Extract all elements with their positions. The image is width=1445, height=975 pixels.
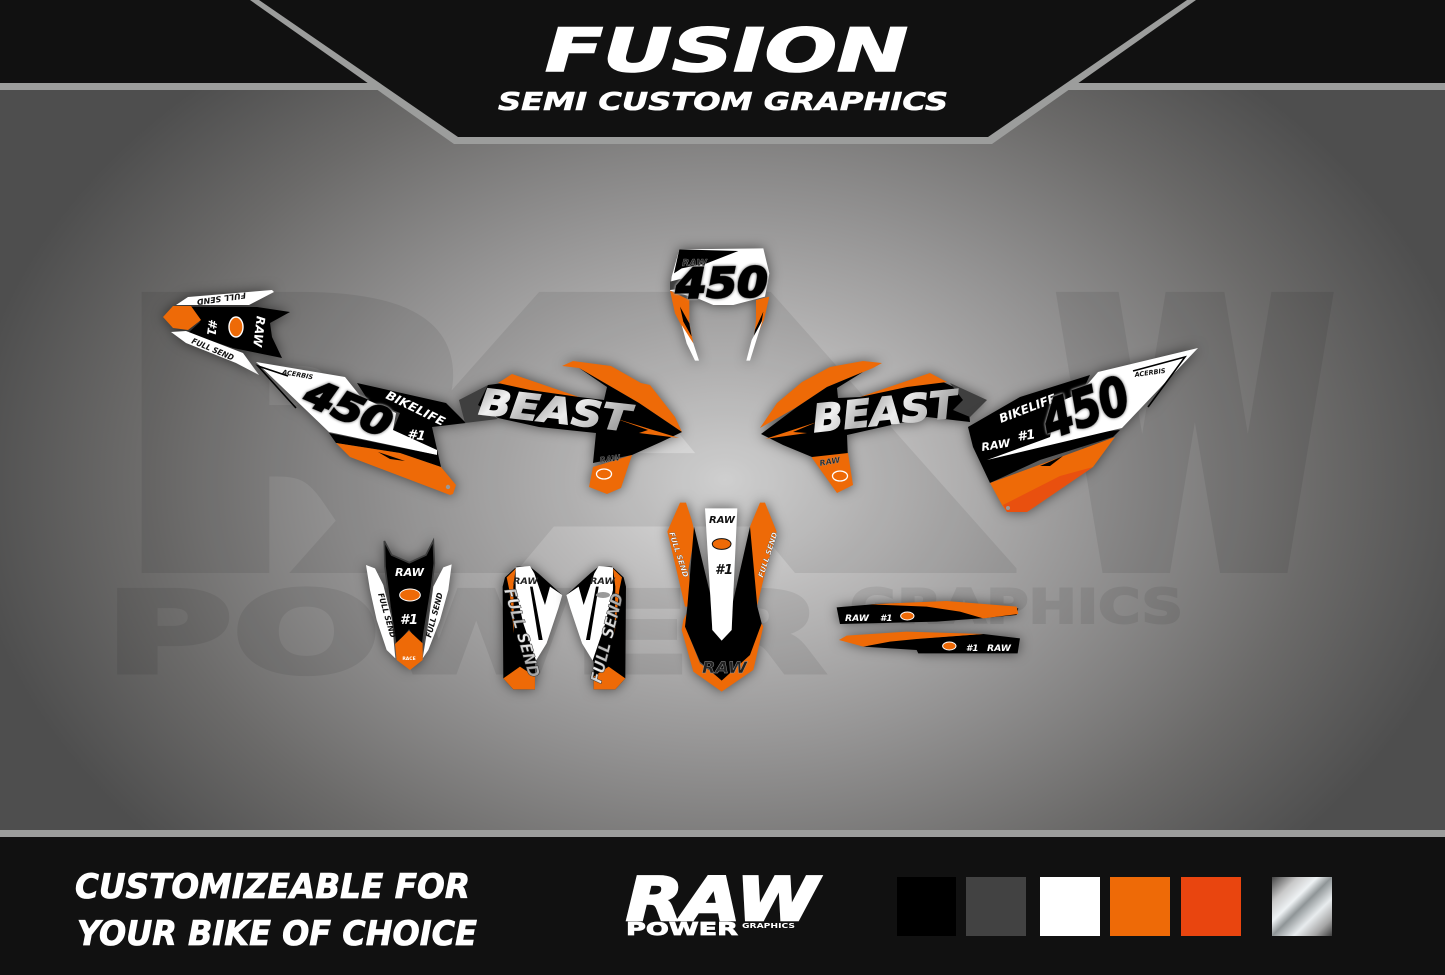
panel jag [378, 452, 405, 461]
front fender RAW bottom: RAW [702, 658, 748, 677]
watermark: RAW: W [1060, 235, 1330, 643]
r shroud grey [950, 383, 987, 417]
footer heading line 2: YOUR BIKE OF CHOICE [77, 914, 477, 954]
background gradient panel [0, 85, 1445, 835]
logo RAW: RAW [626, 865, 821, 935]
fender black body [188, 307, 290, 358]
left radiator shroud [459, 361, 682, 494]
rear fender shapes [366, 541, 452, 670]
footer grey strip [0, 830, 1445, 837]
header black notch [259, 0, 1187, 137]
front fender text right: FULL SEND [756, 531, 779, 579]
r shroud text BEAST: BEAST [810, 382, 962, 441]
right panel number: 450 [1034, 366, 1137, 452]
swatch grey [966, 877, 1026, 936]
plate number: 450 [674, 258, 768, 308]
header grey strip [0, 83, 1445, 90]
guard right text: FULL SEND [586, 591, 627, 685]
fender text low: FULL SEND [190, 337, 235, 363]
shroud black [478, 368, 682, 463]
r shroud small RAW: RAW [819, 455, 842, 468]
bikelife text: BIKELIFE [384, 388, 448, 429]
header black base [0, 0, 1445, 83]
guard left RAW: RAW [513, 577, 539, 587]
swatch white [1040, 877, 1100, 936]
fender logo badge [229, 317, 243, 337]
front number plate [670, 248, 769, 361]
swatch red-orange [1181, 877, 1241, 936]
r panel triangle line [1133, 357, 1185, 407]
rear fender text right: FULL SEND [424, 591, 445, 639]
bikelife text right: BIKELIFE [997, 391, 1059, 426]
r shroud orange lower [812, 453, 853, 493]
shroud text BEAST: BEAST [477, 382, 635, 440]
swingarm shapes [837, 601, 1020, 653]
right radiator shroud [760, 361, 987, 493]
r panel orange [990, 437, 1115, 512]
left rear fender [163, 290, 290, 375]
panel white [256, 362, 437, 455]
r panel jag [1040, 456, 1063, 466]
guard left shapes [503, 566, 562, 689]
header grey chevron [250, 0, 1196, 144]
plate logo text: RAW [682, 258, 708, 269]
shroud orange slash [614, 418, 679, 438]
guard right shapes [566, 566, 626, 689]
guard right hole [596, 592, 610, 598]
r shroud orange wing [760, 361, 882, 428]
brand logo [626, 865, 821, 940]
footer black base [0, 837, 1445, 975]
left side panel [256, 362, 466, 495]
shroud badge [596, 469, 612, 479]
watermark: POWER: POWER [105, 569, 825, 699]
panel number: 450 [297, 370, 399, 446]
swingarm RAW bottom: RAW [987, 644, 1012, 654]
right side panel [968, 348, 1198, 512]
fender text top: FULL SEND [196, 291, 246, 306]
colour swatches [897, 877, 1332, 936]
RAW text right: RAW [980, 436, 1012, 454]
front fender text left: FULL SEND [667, 531, 690, 578]
watermark: RAW [115, 235, 1330, 643]
rear fender [366, 541, 452, 670]
fender RAW: RAW [250, 315, 268, 349]
acerbis text right: ACERBIS [1133, 367, 1166, 379]
shroud grey [459, 385, 498, 423]
r panel white [987, 348, 1198, 460]
r shroud orange slash [765, 422, 817, 439]
fork guard right [566, 566, 627, 689]
shroud orange strip [498, 374, 579, 397]
watermark logo [105, 235, 1330, 699]
logo POWER: POWER [626, 919, 738, 940]
panel black stripe [329, 433, 441, 467]
plate shapes [670, 248, 769, 361]
r shroud orange strip [860, 373, 947, 397]
shroud orange wing [562, 361, 682, 432]
front fender shapes [667, 503, 777, 692]
subtitle: SEMI CUSTOM GRAPHICS [498, 87, 948, 116]
r shroud black [761, 372, 970, 460]
shroud orange lower [589, 455, 632, 494]
rear fender #1: #1 [400, 613, 418, 628]
fork guard left [500, 566, 562, 689]
panel black upper [357, 383, 466, 467]
rear fender RAW: RAW [395, 566, 425, 579]
front fender RAW top: RAW [709, 515, 736, 526]
swingarm RAW top: RAW [845, 614, 870, 624]
shroud small RAW: RAW [599, 453, 622, 465]
header band [0, 0, 1445, 144]
swatch orange [1110, 877, 1170, 936]
watermark: RAW: R [115, 235, 490, 643]
rear fender text left: FULL SEND [376, 592, 397, 639]
guard right RAW: RAW [590, 577, 616, 587]
watermark: RAW: A [330, 235, 986, 643]
r panel black [968, 375, 1120, 483]
front fender [667, 503, 779, 692]
panel orange [336, 443, 456, 495]
r shroud badge [832, 471, 848, 481]
fender lower white [171, 331, 259, 375]
#1 text right: #1 [1016, 427, 1036, 445]
swatch chrome [1272, 877, 1332, 936]
footer band [0, 830, 1445, 975]
swingarm #1 bottom: #1 [966, 644, 979, 654]
fender orange hexagon [163, 306, 201, 330]
swatch black [897, 877, 956, 936]
r panel deep orange [1003, 467, 1093, 512]
#1 text: #1 [406, 427, 426, 444]
footer heading line 1: CUSTOMIZEABLE FOR [75, 867, 470, 907]
fender top white [176, 290, 274, 305]
panel black triangle line [258, 366, 296, 408]
swingarm #1 top: #1 [880, 614, 893, 624]
acerbis text: ACERBIS [281, 368, 314, 381]
logo GRAPHICS: GRAPHICS [742, 922, 795, 930]
r panel bolt hole [1006, 506, 1010, 510]
fender #1: #1 [204, 318, 220, 337]
guard left text: FULL SEND [500, 586, 544, 680]
panel bolt hole [446, 485, 450, 489]
title: FUSION [545, 16, 908, 86]
watermark: GRAPHICS: GRAPHICS [850, 580, 1183, 635]
rear fender hex text: RACE [402, 656, 416, 662]
swingarm stickers [837, 601, 1020, 654]
front fender #1: #1 [715, 563, 733, 578]
